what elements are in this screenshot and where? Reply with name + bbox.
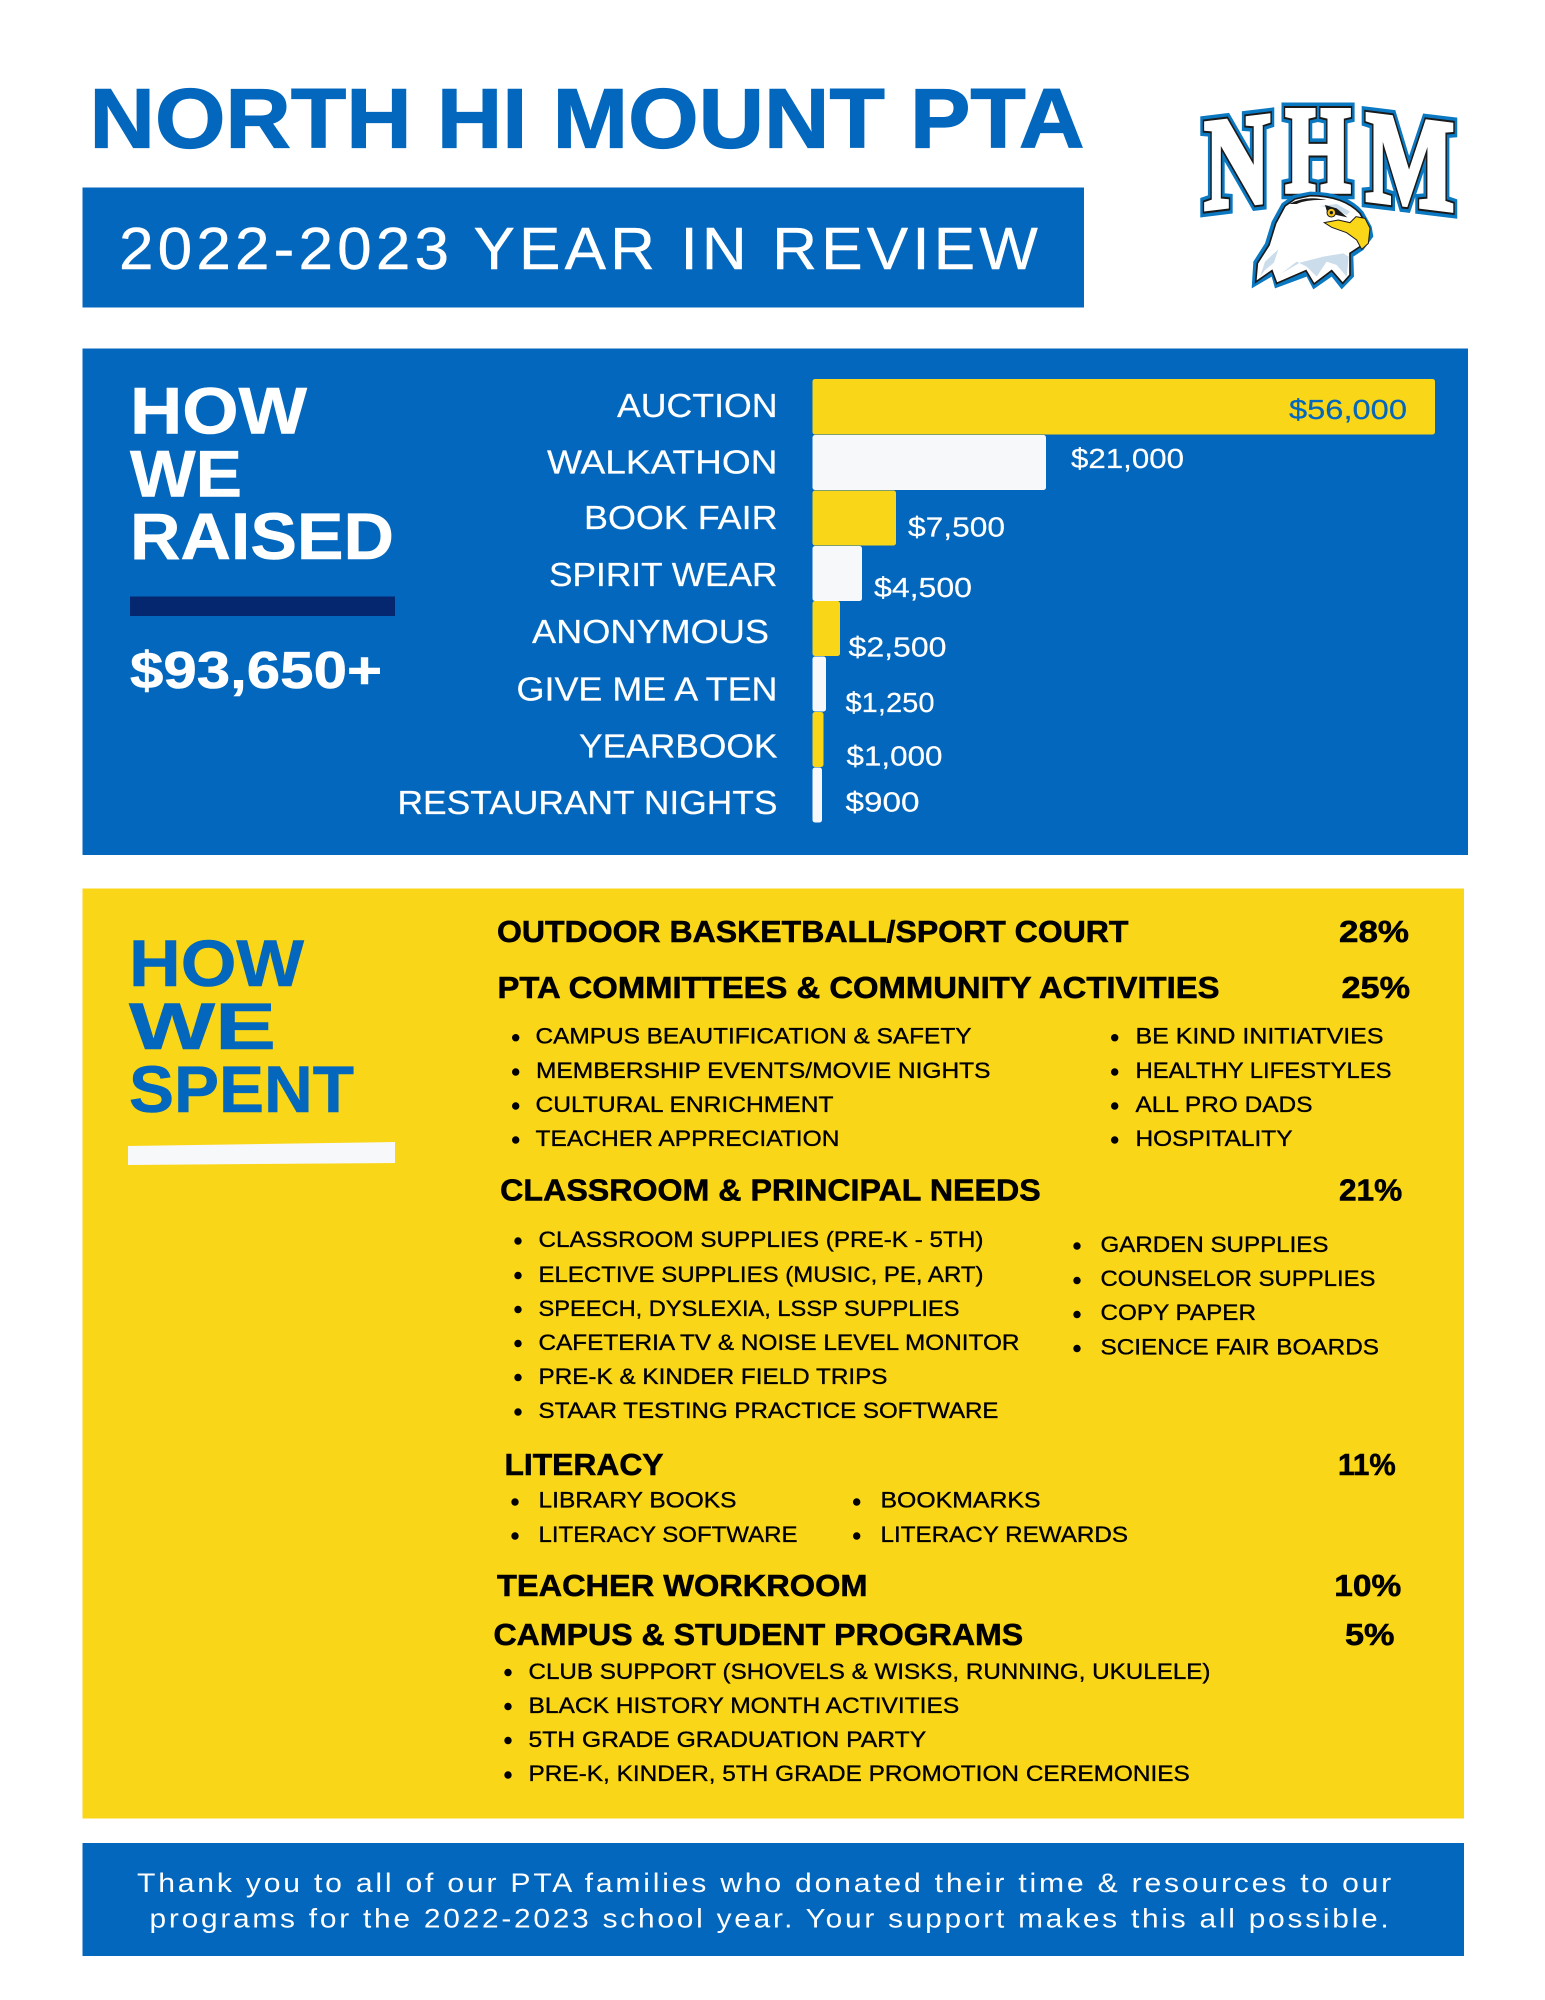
item: outdoor basketball xyxy=(497,915,1409,949)
item: pta committees: 25% xyxy=(1342,971,1410,1005)
item: pta committees: BE KIND INITIATVIES xyxy=(1136,1024,1384,1049)
item: classroom and principal needs: SCIENCE FAIR BOARDS xyxy=(1100,1335,1379,1360)
bar chart xyxy=(812,379,1435,822)
item: pta committees: ALL PRO DADS xyxy=(1136,1092,1312,1117)
item: classroom and principal needs: ELECTIVE SUPPLIES (MUSIC, PE, ART) xyxy=(538,1262,984,1287)
panel: how we spent xyxy=(82,888,1464,1818)
item: literacy: LITERACY REWARDS xyxy=(880,1522,1128,1547)
heading: how we raised: RAISED xyxy=(130,499,394,573)
logo letters: H xyxy=(1285,81,1351,218)
item: campus and student programs: BLACK HISTORY MONTH ACTIVITIES xyxy=(528,1693,959,1718)
logo letters: H xyxy=(1285,81,1351,218)
bar values: $1,250 xyxy=(846,687,934,718)
bar values xyxy=(846,394,1407,818)
item: campus and student programs: PRE-K, KINDER, 5TH GRADE PROMOTION CEREMONIES xyxy=(528,1761,1190,1786)
bar labels: AUCTION xyxy=(617,387,778,424)
banner: year in review: 2022-2023 YEAR IN REVIEW xyxy=(119,215,1042,282)
bar labels: WALKATHON xyxy=(547,444,778,480)
icon: NHM eagle logo xyxy=(1204,81,1454,289)
logo letters: N xyxy=(1204,87,1270,238)
bar labels: SPIRIT WEAR xyxy=(549,556,778,593)
item: pta committees: HOSPITALITY xyxy=(1136,1126,1292,1151)
logo letters: M xyxy=(1366,84,1454,239)
bar values: $7,500 xyxy=(908,512,1005,542)
footer: thank you note: Thank you to all of our PTA families who donated their time & resources to our xyxy=(137,1868,1394,1898)
item: literacy: LITERACY xyxy=(504,1448,664,1482)
logo letters: N xyxy=(1204,87,1270,238)
eagle head xyxy=(1252,192,1373,289)
item: classroom and principal needs xyxy=(500,1174,1402,1423)
bar values: $56,000 xyxy=(1289,394,1407,425)
logo letters: M xyxy=(1366,84,1454,239)
heading: how we raised: HOW xyxy=(130,374,308,448)
bar values: $2,500 xyxy=(848,632,946,662)
bar labels: ANONYMOUS xyxy=(532,613,769,650)
item: campus and student programs: 5% xyxy=(1345,1618,1394,1652)
logo letters: M xyxy=(1366,84,1454,239)
item: literacy: 11% xyxy=(1338,1448,1396,1482)
item: classroom and principal needs: COPY PAPER xyxy=(1100,1300,1256,1325)
footer: thank you note xyxy=(82,1843,1464,1956)
heading: how we spent: SPENT xyxy=(129,1052,354,1126)
item: classroom and principal needs: SPEECH, DYSLEXIA, LSSP SUPPLIES xyxy=(538,1296,960,1321)
heading: how we spent: WE xyxy=(129,989,276,1063)
heading: how we spent: HOW xyxy=(129,926,305,1000)
bar values: $1,000 xyxy=(846,740,942,772)
item: pta committees: TEACHER APPRECIATION xyxy=(536,1126,840,1151)
bar labels: GIVE ME A TEN xyxy=(516,670,778,708)
heading: how we raised xyxy=(130,374,394,573)
item: classroom and principal needs: CAFETERIA TV & NOISE LEVEL MONITOR xyxy=(538,1330,1020,1355)
item: teacher workroom xyxy=(497,1569,1401,1603)
item: classroom and principal needs: PRE-K & KINDER FIELD TRIPS xyxy=(538,1364,888,1389)
item: pta committees: PTA COMMITTEES & COMMUNITY ACTIVITIES xyxy=(498,971,1220,1005)
item: classroom and principal needs: GARDEN SUPPLIES xyxy=(1100,1232,1328,1257)
item: campus and student programs xyxy=(494,1618,1394,1786)
item: classroom and principal needs: CLASSROOM & PRINCIPAL NEEDS xyxy=(500,1174,1041,1208)
banner: year in review xyxy=(82,188,1084,308)
bar labels: YEARBOOK xyxy=(579,728,778,764)
bar values: $4,500 xyxy=(874,572,972,603)
logo letters xyxy=(1204,81,1454,239)
item: classroom and principal needs: COUNSELOR SUPPLIES xyxy=(1100,1266,1376,1291)
item: outdoor basketball: 28% xyxy=(1339,915,1409,949)
item: literacy: BOOKMARKS xyxy=(880,1488,1040,1513)
heading: how we spent xyxy=(129,926,354,1126)
item: teacher workroom: TEACHER WORKROOM xyxy=(497,1569,868,1603)
panel: how we raised xyxy=(82,348,1468,855)
logo letters: N xyxy=(1204,87,1270,238)
divider bar xyxy=(130,596,395,616)
footer: thank you note: programs for the 2022-2023 school year. Your support makes this all possible. xyxy=(150,1904,1392,1934)
item: literacy xyxy=(504,1448,1396,1547)
item: pta committees: MEMBERSHIP EVENTS/MOVIE NIGHTS xyxy=(536,1058,990,1083)
item: outdoor basketball: OUTDOOR BASKETBALL/SPORT COURT xyxy=(497,915,1129,949)
underline bar xyxy=(128,1142,395,1165)
item: classroom and principal needs: 21% xyxy=(1339,1174,1402,1208)
heading: how we raised: WE xyxy=(130,436,242,510)
item: campus and student programs: CAMPUS & STUDENT PROGRAMS xyxy=(494,1618,1023,1652)
bar labels: RESTAURANT NIGHTS xyxy=(398,784,778,821)
bar values: $21,000 xyxy=(1071,443,1184,474)
item: pta committees: HEALTHY LIFESTYLES xyxy=(1136,1058,1392,1083)
bar labels: BOOK FAIR xyxy=(584,499,778,536)
title: NORTH HI MOUNT PTA xyxy=(90,72,1084,166)
logo letters: H xyxy=(1285,81,1351,218)
bar labels xyxy=(398,387,778,821)
item: pta committees: CAMPUS BEAUTIFICATION & SAFETY xyxy=(536,1024,972,1049)
bar values: $900 xyxy=(846,786,920,818)
item: classroom and principal needs: CLASSROOM SUPPLIES (PRE-K - 5TH) xyxy=(538,1227,984,1252)
item: campus and student programs: 5TH GRADE GRADUATION PARTY xyxy=(528,1727,926,1752)
item: campus and student programs: CLUB SUPPORT (SHOVELS & WISKS, RUNNING, UKULELE) xyxy=(528,1659,1210,1684)
item: teacher workroom: 10% xyxy=(1334,1569,1401,1603)
item: pta committees xyxy=(498,971,1410,1151)
item: literacy: LIBRARY BOOKS xyxy=(538,1488,736,1513)
total raised: $93,650+ xyxy=(130,642,382,700)
item: classroom and principal needs: STAAR TESTING PRACTICE SOFTWARE xyxy=(538,1398,998,1423)
item: pta committees: CULTURAL ENRICHMENT xyxy=(536,1092,834,1117)
item: literacy: LITERACY SOFTWARE xyxy=(538,1522,798,1547)
